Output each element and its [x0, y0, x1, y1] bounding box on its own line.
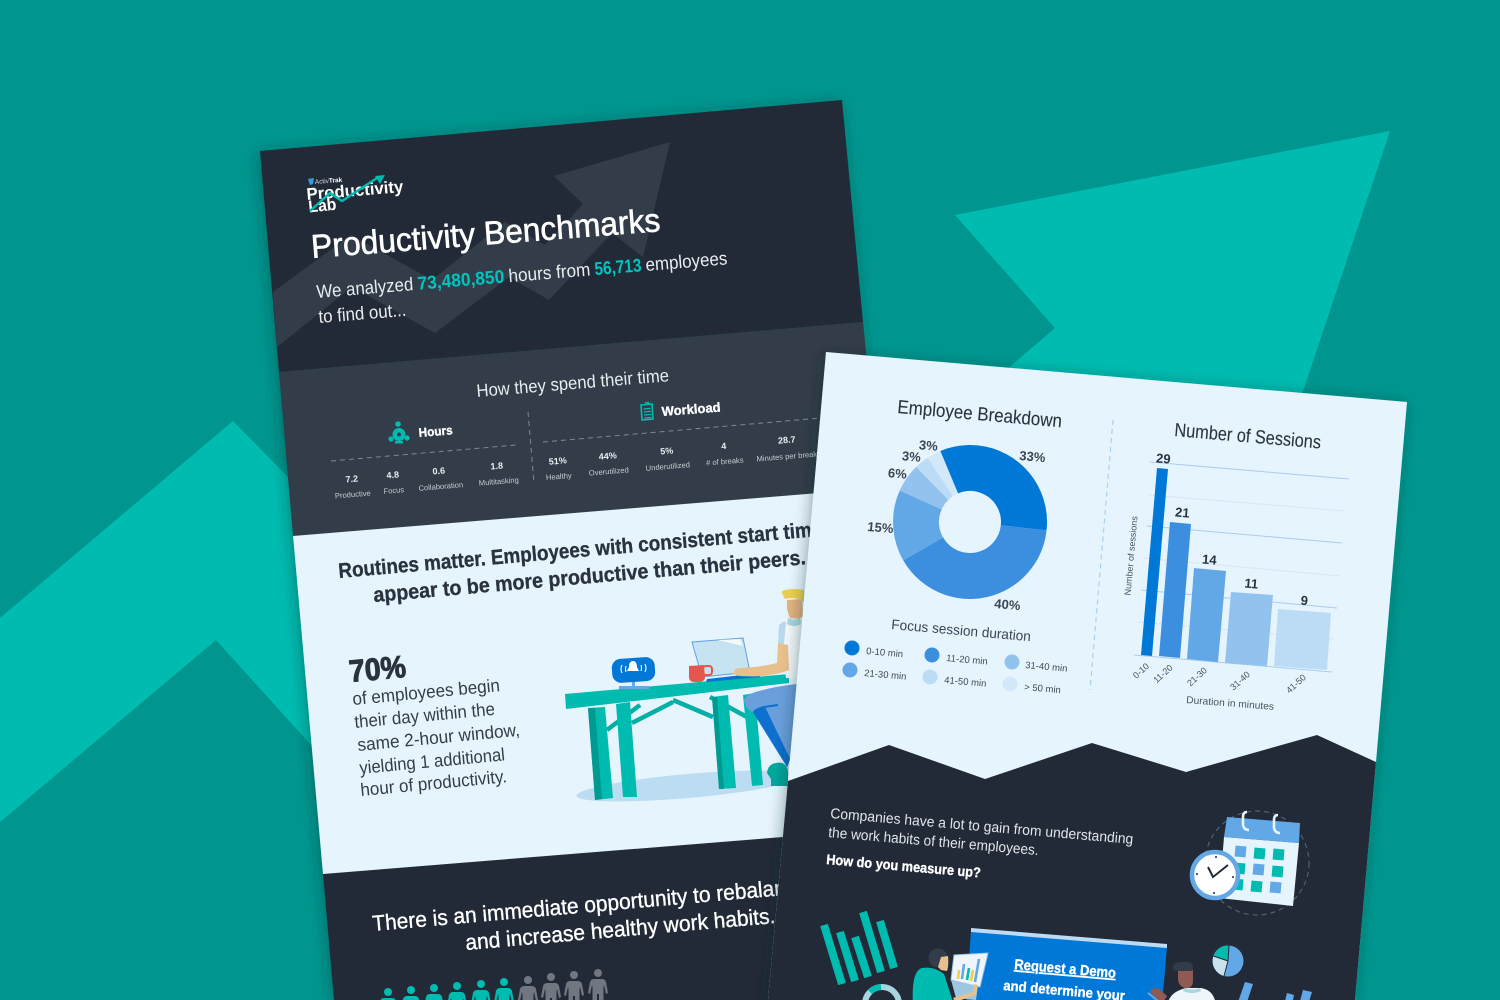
icon: laptop: [692, 638, 760, 682]
bar chart: sessions: 14: [1202, 551, 1218, 568]
stats: workload: 44%: [598, 450, 617, 462]
bar chart: sessions: 11: [1244, 575, 1259, 592]
logo: Productivity: [306, 177, 405, 204]
logo: Lab: [307, 195, 337, 216]
figure: person with tablet: [1148, 962, 1216, 1000]
legend: 41-50 min: [944, 675, 987, 690]
donut labels: 6%: [887, 465, 908, 482]
panel: request a demo banner: [966, 928, 1167, 1000]
icon: ring chart: [865, 987, 899, 1000]
logo: [306, 175, 405, 216]
legend title: Focus session duration: [891, 616, 1032, 644]
icon: red mug: [689, 665, 712, 682]
stats: hours: 1.8: [490, 461, 503, 472]
text block: 70% description: their day within the: [353, 699, 496, 732]
stats: hours: Multitasking: [478, 475, 519, 488]
logo: ActivTrak: [315, 177, 343, 186]
legend: [842, 640, 1068, 696]
subtitle: hours from: [508, 259, 591, 286]
subtitle: 73,480,850: [417, 266, 505, 294]
bar chart: sessions: 21: [1175, 504, 1190, 521]
text block: 70% description: [351, 675, 521, 800]
heading: routines second line: appear to be more productive than their peers.: [372, 546, 807, 607]
callout: how do you measure up: How do you measure up?: [826, 851, 982, 880]
donut labels: 3%: [901, 448, 922, 465]
icon: teal bars: [824, 912, 894, 984]
heading: routines matter: Routines matter. Employees with consistent start times: [337, 517, 834, 583]
panel: header: [260, 100, 863, 372]
panel: right infographic page: [768, 352, 1407, 1000]
legend: 21-30 min: [864, 668, 907, 683]
text block: companies: the work habits of their employees.: [828, 825, 1039, 859]
arrow: header watermark: [273, 142, 670, 347]
icon: calendar and clock: [1192, 811, 1309, 915]
stats: hours: 4.8: [386, 470, 399, 481]
donut labels: 33%: [1019, 448, 1046, 465]
stats: hours: 7.2: [345, 474, 358, 485]
subtitle: We analyzed: [316, 273, 414, 302]
stats: workload: 4: [721, 441, 727, 451]
heading: how they spend their time: How they spend their time: [476, 365, 670, 401]
icon: pie chart: [1212, 945, 1244, 976]
legend: 11-20 min: [946, 653, 988, 668]
subtitle: 56,713: [594, 254, 642, 279]
panel: dark call-to-action section: [768, 735, 1376, 1000]
stats: workload: 51%: [548, 455, 567, 467]
stats: workload: Minutes per break: [756, 450, 818, 463]
text block: 70% description: of employees begin: [351, 675, 501, 709]
panel: left infographic page: [260, 100, 880, 1000]
text block: 70% description: hour of productivity.: [359, 766, 508, 800]
panel: time section: [279, 322, 880, 536]
panel: page background: [768, 352, 1407, 1000]
label: hours: Hours: [418, 423, 453, 440]
figure: person with laptop: [913, 948, 988, 1000]
bar chart: sessions: 9: [1300, 593, 1309, 608]
illustration: desk with person: [565, 589, 804, 808]
legend: 31-40 min: [1025, 660, 1068, 675]
link: request a demo: Request a Demo: [1014, 957, 1117, 982]
donut labels: 3%: [918, 437, 939, 454]
bar chart: sessions: 21-30: [1185, 665, 1209, 688]
donut labels: 15%: [867, 519, 894, 536]
bar chart: sessions: 41-50: [1284, 672, 1308, 695]
text block: companies: Companies have a lot to gain from understanding: [830, 806, 1134, 848]
title: Productivity Benchmarks: [310, 201, 662, 265]
stat: 70%: 70%: [347, 649, 407, 689]
heading: number of sessions: Number of Sessions: [1174, 420, 1322, 454]
bar chart: sessions: [1123, 450, 1349, 713]
stats: workload: [546, 434, 818, 482]
text block: 70% description: same 2-hour window,: [356, 720, 521, 755]
stats: hours: [335, 461, 519, 500]
stats: hours: Productive: [335, 489, 371, 500]
bar chart: sessions: 31-40: [1228, 669, 1252, 692]
arrow: background left: [0, 421, 340, 822]
text block: 70% description: yielding 1 additional: [358, 744, 506, 778]
stats: workload: Overutilized: [588, 465, 629, 478]
bar chart: sessions: Number of sessions: [1123, 515, 1140, 596]
heading: immediate opportunity: There is an immediate opportunity to rebalance: [371, 873, 809, 936]
panel: light routines section: [293, 488, 870, 874]
donut chart: [899, 451, 1041, 593]
legend: > 50 min: [1024, 682, 1061, 696]
heading: immediate opportunity second line: and increase healthy work habits.: [464, 903, 776, 955]
bar chart: sessions: Duration in minutes: [1186, 695, 1274, 713]
subtitle: [316, 247, 728, 302]
subtitle second line: to find out...: [318, 299, 407, 327]
stats: workload: # of breaks: [706, 455, 744, 468]
stats: workload: 28.7: [778, 434, 796, 446]
icon: hours: [388, 421, 410, 444]
stats: workload: 5%: [660, 445, 674, 457]
panel: dark lower section of left page: [323, 832, 820, 1000]
icon: bell sign: [611, 656, 656, 689]
stats: workload: Underutilized: [645, 460, 690, 473]
label: workload: Workload: [661, 400, 721, 419]
stats: hours: Focus: [383, 485, 405, 496]
pictogram: people: [378, 969, 608, 1000]
stats: hours: 0.6: [432, 466, 445, 477]
heading: employee breakdown: Employee Breakdown: [897, 397, 1063, 432]
bar chart: sessions: 29: [1156, 450, 1171, 467]
icon: workload battery: [641, 403, 653, 420]
donut labels: [867, 437, 1046, 613]
figure: person: [733, 589, 804, 786]
subtitle: employees: [645, 247, 728, 275]
icon: blue bars: [1237, 982, 1312, 1000]
donut labels: 40%: [994, 596, 1021, 613]
legend: 0-10 min: [866, 646, 904, 660]
bar chart: sessions: 0-10: [1131, 661, 1151, 681]
bar chart: sessions: 11-20: [1151, 663, 1175, 685]
stats: hours: Collaboration: [418, 480, 463, 493]
arrow: background right: [955, 131, 1390, 430]
stats: workload: Healthy: [546, 471, 572, 482]
